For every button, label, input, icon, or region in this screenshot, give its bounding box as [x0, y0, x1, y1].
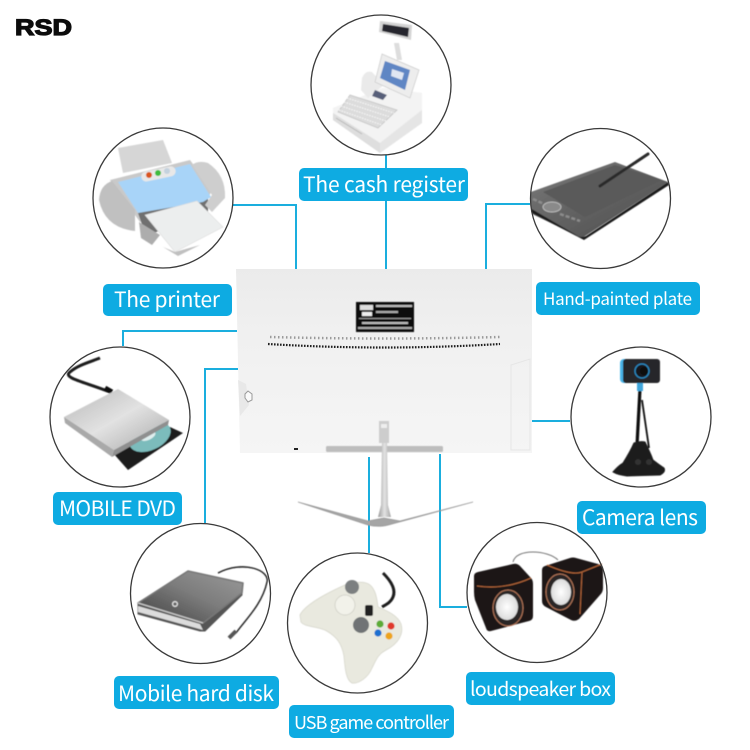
icon: webcam — [613, 359, 664, 476]
circle outline — [288, 553, 428, 693]
stand — [298, 421, 473, 526]
panel: printer — [93, 128, 233, 268]
label: mobile hard disk: Mobile hard disk — [118, 678, 274, 708]
label: usb game controller: USB game controller — [294, 709, 450, 735]
vents — [268, 337, 500, 348]
panel: loudspeaker box — [467, 522, 607, 662]
icon: hard disk — [138, 567, 267, 638]
logo: RSD — [15, 15, 72, 40]
label: loudspeaker box: loudspeaker box — [470, 673, 611, 702]
label: mobile dvd: MOBILE DVD — [59, 493, 176, 523]
icon: drawing tablet — [528, 154, 669, 240]
label: printer: The printer — [114, 284, 221, 314]
panel: mobile hard disk — [130, 524, 270, 664]
icon: speakers — [474, 552, 603, 631]
circle outline — [467, 522, 607, 662]
icon: dvd drive — [64, 358, 183, 470]
label: cash register: The cash register — [303, 169, 466, 199]
icon: game controller — [300, 573, 402, 683]
circle outline — [50, 347, 190, 487]
monitor back panel — [236, 269, 532, 453]
panel: mobile dvd — [50, 347, 190, 487]
circle outline — [130, 524, 270, 664]
monitor — [236, 269, 532, 526]
circle outline — [93, 128, 233, 268]
circle outline — [530, 128, 670, 268]
circle outline — [311, 15, 451, 155]
keyboard — [338, 95, 397, 128]
register base — [333, 88, 422, 153]
icon: cash register — [333, 21, 422, 153]
panel: camera lens — [571, 347, 711, 487]
icon: printer — [99, 140, 225, 256]
connector lines — [123, 155, 570, 607]
label: camera lens: Camera lens — [582, 502, 698, 532]
label: hand-painted plate — [536, 282, 700, 315]
panel: usb game controller — [288, 553, 428, 693]
circle outline — [571, 347, 711, 487]
spec label — [356, 302, 414, 332]
panel: cash register — [311, 15, 451, 155]
panel: hand-painted plate — [528, 128, 670, 268]
label: hand-painted plate: Hand-painted plate — [543, 285, 692, 310]
